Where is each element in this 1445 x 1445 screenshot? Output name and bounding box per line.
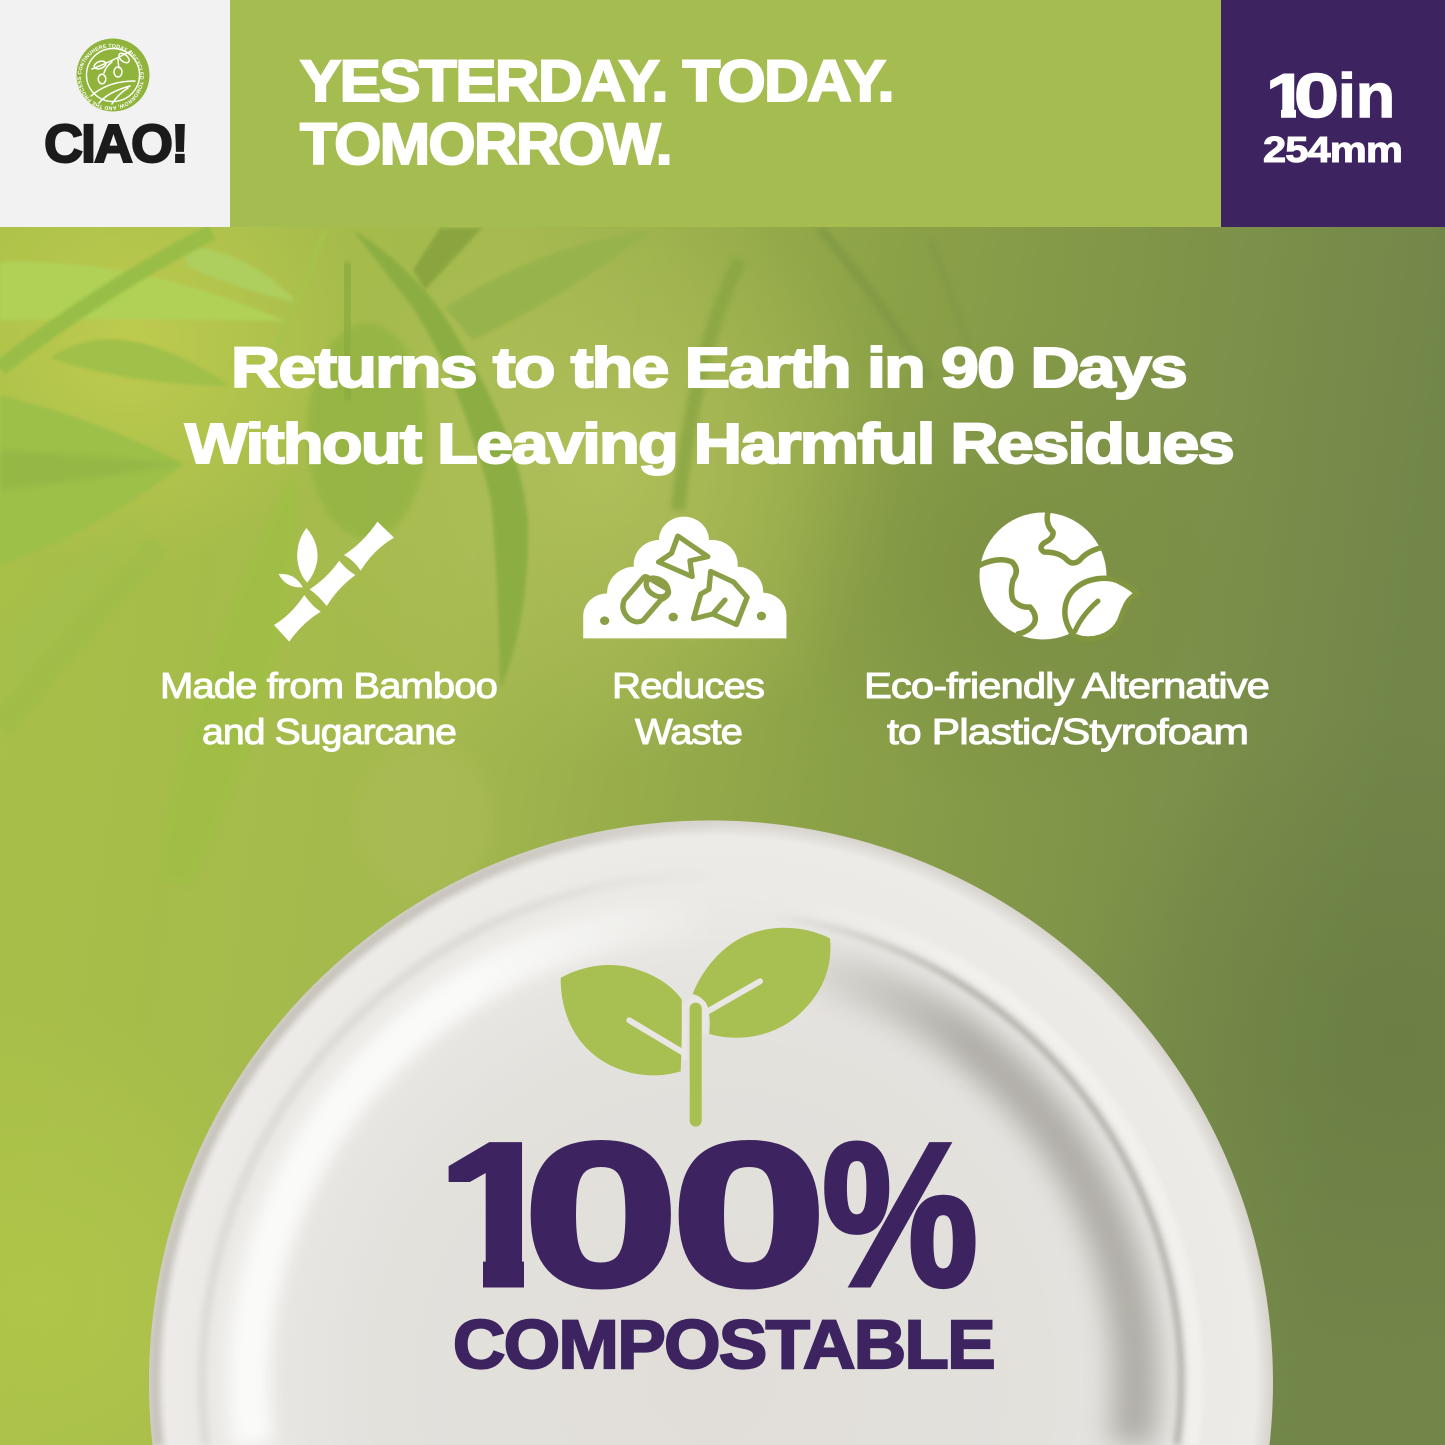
header: logo panel: [0, 0, 230, 227]
size in inches: [1270, 71, 1392, 118]
size in inches: 0: [1294, 62, 1339, 131]
label: eco-friendly: Eco-friendly Alternative: [864, 665, 1269, 706]
label: reduces waste: Waste: [635, 711, 742, 752]
headline: 100%: 1: [436, 1101, 561, 1329]
size in millimetres: 254mm: [1263, 129, 1402, 170]
plate: [149, 820, 1273, 1445]
label: reduces waste: Reduces: [612, 665, 764, 706]
size in inches: in: [1338, 62, 1395, 131]
label: eco-friendly: to Plastic/Styrofoam: [887, 711, 1248, 752]
headline: 100%: 0: [671, 1101, 827, 1329]
headline: 100%: %: [822, 1101, 978, 1329]
icon: recycling badge logo: [76, 38, 150, 112]
bamboo leaves: [0, 228, 985, 895]
label: bamboo: Made from Bamboo: [160, 665, 497, 706]
slogan: TOMORROW.: [300, 112, 671, 177]
icon: bamboo: [274, 522, 394, 642]
brand name: CIAO!: [44, 114, 187, 174]
icon: compost pile: [583, 517, 786, 638]
headline: 100%: [448, 1140, 976, 1290]
headline: 100%: 0: [523, 1101, 679, 1329]
icon: earth with leaf: [978, 512, 1137, 640]
header: size panel: [1221, 0, 1445, 227]
icon: sprout: [561, 928, 830, 1127]
main heading: Returns to the Earth in 90 Days: [231, 336, 1186, 400]
size in inches: 1: [1266, 62, 1307, 131]
header: slogan panel: [230, 0, 1221, 227]
main heading: Without Leaving Harmful Residues: [185, 412, 1233, 476]
slogan: YESTERDAY. TODAY.: [300, 49, 893, 114]
label: bamboo: and Sugarcane: [202, 711, 456, 752]
headline: compostable: COMPOSTABLE: [453, 1306, 994, 1383]
